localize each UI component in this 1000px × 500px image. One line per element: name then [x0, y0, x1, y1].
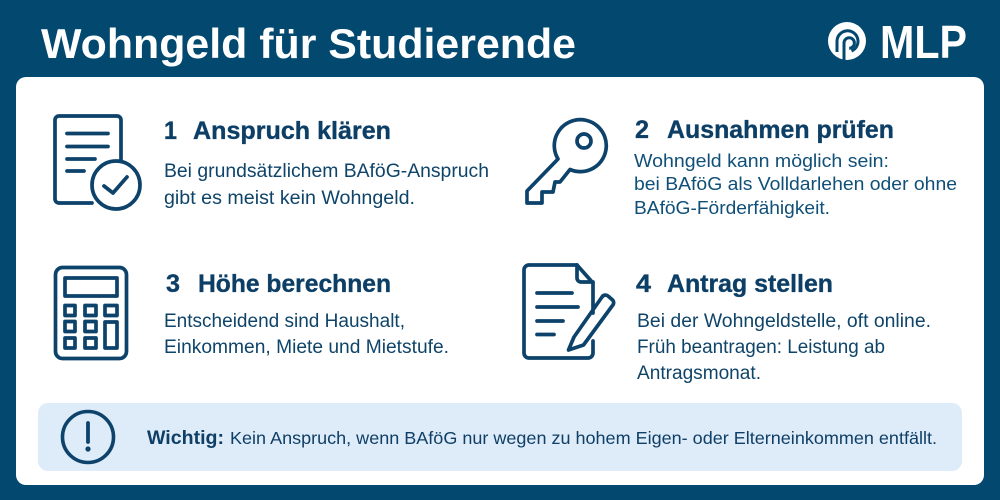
text 1: gibt es meist kein Wohngeld.	[164, 188, 415, 209]
heading 3: 3	[166, 270, 180, 298]
text 3: Einkommen, Miete und Mietstufe.	[164, 337, 449, 358]
icon: calculator	[56, 268, 126, 358]
step 3	[56, 268, 449, 358]
callout: important	[38, 403, 962, 471]
step 2	[527, 116, 957, 218]
text 2: bei BAföG als Volldarlehen oder ohne	[634, 173, 957, 194]
icon: document with check	[55, 116, 140, 209]
icon: exclamation mark	[62, 412, 114, 462]
callout text: Kein Anspruch, wenn BAföG nur wegen zu hohem Eigen- oder Elterneinkommen entfällt.	[230, 428, 937, 448]
title: Wohngeld für Studierende	[41, 20, 576, 67]
heading 1: 1	[164, 117, 177, 145]
text 1: Bei grundsätzlichem BAföG-Anspruch	[164, 161, 489, 182]
text 3: Entscheidend sind Haushalt,	[164, 311, 405, 332]
step 1	[55, 116, 489, 209]
logo: MLP: MLP	[880, 16, 967, 68]
heading 3: Höhe berechnen	[198, 270, 391, 298]
panel: main card	[16, 77, 984, 485]
text 2: Wohngeld kann möglich sein:	[634, 150, 889, 171]
text 4: Antragsmonat.	[637, 363, 761, 384]
icon: document with pencil	[524, 265, 614, 358]
icon: key	[527, 120, 606, 203]
text 4: Früh beantragen: Leistung ab	[637, 337, 885, 358]
callout text: Wichtig:	[147, 428, 224, 449]
logo: MLP	[828, 16, 967, 68]
step 4	[524, 265, 931, 384]
heading 2: Ausnahmen prüfen	[667, 116, 894, 144]
text 4: Bei der Wohngeldstelle, oft online.	[637, 311, 931, 332]
heading 2: 2	[635, 116, 649, 144]
heading 1: Anspruch klären	[193, 117, 391, 145]
text 2: BAföG-Förderfähigkeit.	[634, 197, 830, 218]
heading 4: 4	[636, 270, 651, 298]
heading 4: Antrag stellen	[667, 270, 833, 298]
